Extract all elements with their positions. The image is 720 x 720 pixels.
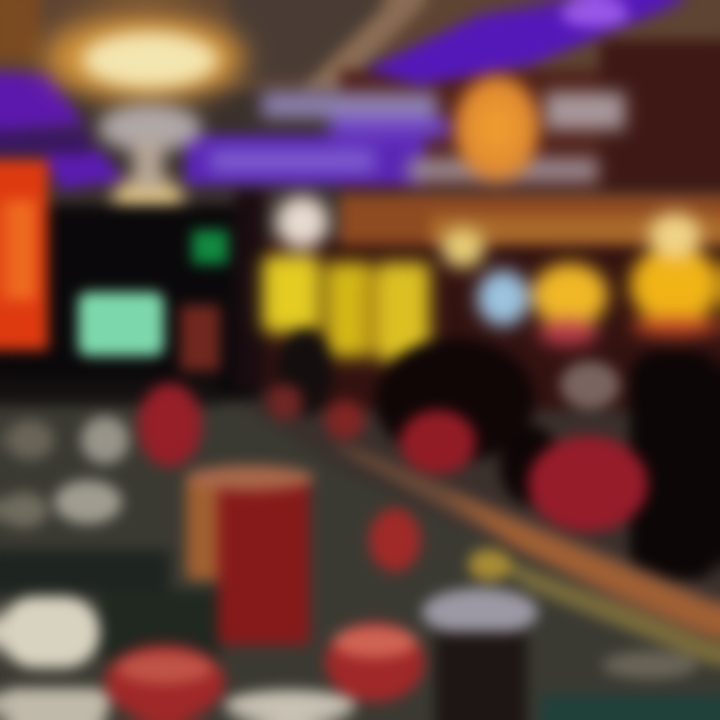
orange sign glow bbox=[447, 66, 547, 190]
counter bbox=[330, 445, 720, 668]
yellow lights bbox=[262, 196, 720, 362]
sign bands bbox=[210, 92, 625, 182]
floor checks bbox=[0, 416, 720, 720]
red chairs bbox=[138, 383, 648, 581]
red cylinder table bbox=[186, 465, 314, 645]
ceiling bbox=[0, 0, 720, 190]
dark silhouettes bbox=[277, 328, 720, 580]
purple lights bbox=[0, 0, 690, 190]
floor bbox=[0, 380, 720, 720]
mid dark wall bbox=[0, 190, 720, 410]
chandelier bbox=[45, 14, 245, 102]
red stools bbox=[105, 622, 425, 720]
signs and screens bbox=[0, 160, 228, 371]
